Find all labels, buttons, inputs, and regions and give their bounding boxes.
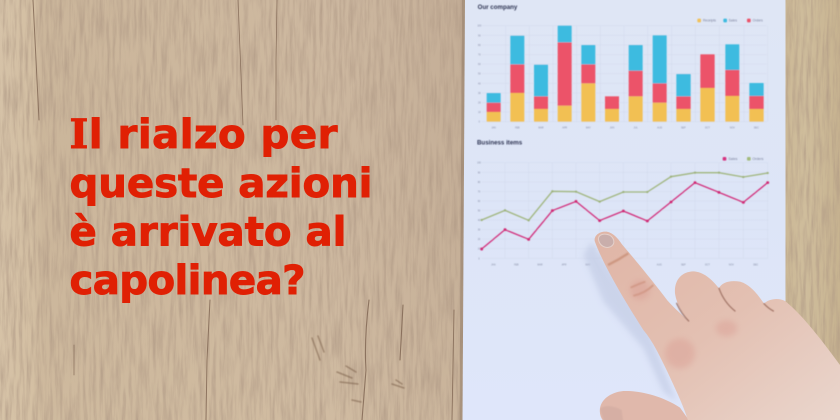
bar chart: Our company: 10 bbox=[478, 112, 481, 114]
sales line bbox=[480, 181, 769, 250]
axis labels: FEB bbox=[515, 128, 520, 130]
bar chart: Our company: 60 bbox=[478, 64, 481, 66]
axis labels: NOV bbox=[729, 264, 734, 266]
bar chart: Our company: 20 bbox=[478, 103, 481, 105]
bar chart: Our company: 100 bbox=[477, 26, 482, 28]
knuckle creases and redness bbox=[608, 253, 653, 296]
legend: receipts, sales, orders: Sales bbox=[729, 19, 737, 23]
bar chart: Our company: 50 bbox=[478, 74, 481, 76]
bar chart: Our company: 0 bbox=[479, 122, 481, 124]
axis labels: AUG bbox=[657, 263, 662, 266]
legend: receipts, sales, orders: Receipts bbox=[703, 19, 716, 23]
axis labels: APR bbox=[562, 127, 567, 130]
line chart: Business items: 90 bbox=[478, 172, 481, 174]
title: capolinea? bbox=[70, 257, 306, 304]
legend: receipts, sales, orders bbox=[697, 19, 763, 23]
thumb bbox=[600, 391, 690, 420]
axis labels bbox=[491, 127, 759, 130]
legend: sales, orders: Sales bbox=[728, 157, 738, 161]
axis labels: SEP bbox=[681, 128, 686, 130]
bar chart: Our company: 70 bbox=[478, 55, 481, 57]
axis labels bbox=[491, 263, 758, 266]
axis labels: AUG bbox=[657, 127, 662, 130]
legend: sales, orders: Orders bbox=[752, 157, 764, 161]
line chart: Business items: 70 bbox=[478, 192, 481, 194]
chart heading: Our company: Our company bbox=[478, 4, 518, 11]
grid lines bbox=[482, 26, 768, 122]
pointing hand bbox=[583, 232, 840, 420]
line chart: Business items: 0 bbox=[478, 258, 480, 260]
line chart: Business items: 20 bbox=[478, 239, 481, 241]
orders line bbox=[480, 171, 769, 221]
axis labels: DEC bbox=[753, 264, 758, 266]
line chart: Business items: 50 bbox=[478, 210, 481, 212]
legend: receipts, sales, orders: Orders bbox=[753, 19, 763, 23]
axis labels: OCT bbox=[705, 128, 710, 130]
bar chart: Our company: 40 bbox=[478, 83, 481, 85]
chart heading: Business items: Business items bbox=[477, 140, 523, 147]
axis labels: MAR bbox=[537, 263, 543, 266]
axis labels: SEP bbox=[681, 264, 686, 266]
yellow receipts bars bbox=[487, 83, 764, 122]
line chart: Business items: 10 bbox=[478, 249, 481, 251]
axis labels: JUL bbox=[634, 128, 638, 130]
axis labels: JAN bbox=[491, 263, 496, 266]
title bbox=[70, 110, 372, 304]
legend: sales, orders bbox=[723, 157, 764, 161]
axis labels: DEC bbox=[754, 128, 759, 130]
red orders bars bbox=[487, 42, 764, 112]
axis labels: FEB bbox=[514, 264, 519, 266]
axis labels: MAY bbox=[586, 263, 591, 266]
axis labels: NOV bbox=[730, 128, 735, 130]
paper report bbox=[460, 0, 786, 420]
bar chart: Our company: 80 bbox=[478, 45, 481, 47]
blue sales bars bbox=[487, 26, 764, 103]
title: queste azioni bbox=[70, 160, 372, 207]
line chart: Business items: 30 bbox=[478, 230, 481, 232]
finger shadow on paper bbox=[583, 242, 677, 402]
axis labels: MAY bbox=[586, 127, 591, 130]
line chart: Business items: 40 bbox=[478, 220, 481, 222]
axis labels: APR bbox=[562, 263, 567, 266]
fingernail bbox=[598, 234, 614, 247]
axis labels: JUN bbox=[610, 128, 615, 130]
bar chart: Our company bbox=[477, 4, 768, 130]
axis labels: OCT bbox=[705, 264, 710, 266]
axis labels: MAR bbox=[538, 127, 544, 130]
title: è arrivato al bbox=[70, 208, 346, 256]
bar chart: Our company: 90 bbox=[478, 35, 481, 37]
line chart: Business items bbox=[477, 140, 769, 266]
bar chart: Our company: 30 bbox=[478, 93, 481, 95]
line chart: Business items: 100 bbox=[477, 163, 482, 165]
grid lines bbox=[482, 163, 768, 258]
title: Il rialzo per bbox=[70, 110, 338, 158]
line chart: Business items: 60 bbox=[478, 201, 481, 203]
finger separation lines bbox=[677, 288, 773, 321]
line chart: Business items: 80 bbox=[478, 182, 481, 184]
hand and fingers bbox=[595, 232, 840, 420]
axis labels: JAN bbox=[491, 127, 496, 130]
